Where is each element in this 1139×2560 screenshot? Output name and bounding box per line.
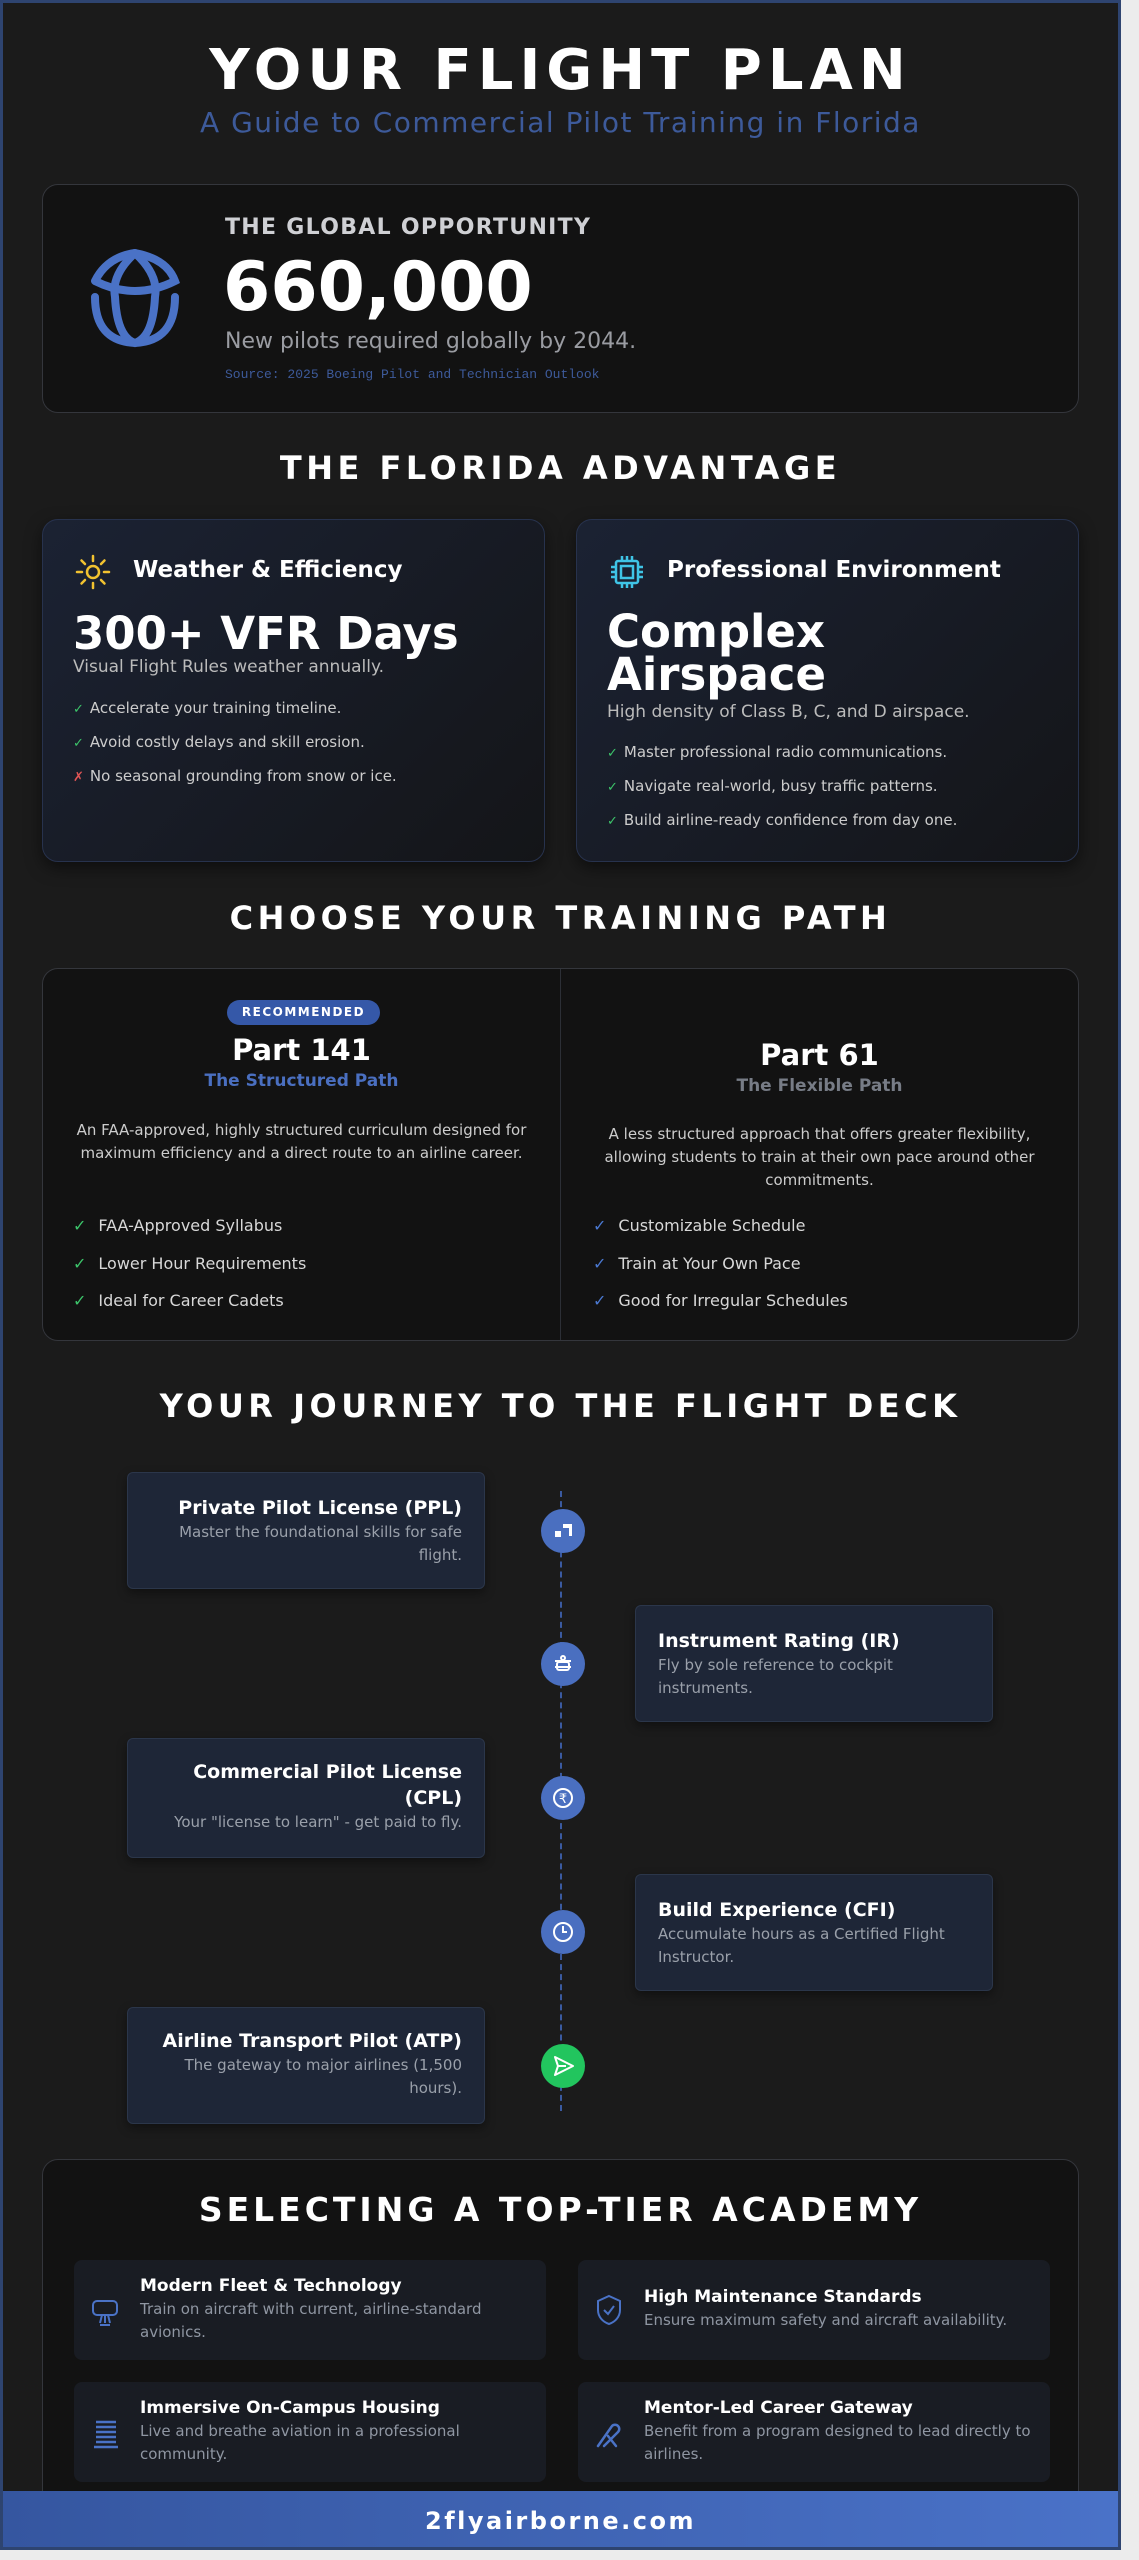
timeline: [127, 1472, 993, 2125]
part 141 column: An FAA-approved, highly structured curriculum designed for maximum efficiency and a direct route to an airline career.: [77, 1121, 526, 1162]
step: PPL: Private Pilot License (PPL): [178, 1497, 462, 1519]
icon: cpl: [541, 1776, 585, 1820]
step: CPL: Commercial Pilot License (CPL): [193, 1761, 462, 1809]
icon: globe: [91, 249, 180, 348]
heading: Weather & Efficiency: [133, 557, 403, 583]
heading: SELECTING A TOP-TIER ACADEMY: [199, 2190, 922, 2229]
checklist: ✓ Lower Hour Requirements: [73, 1254, 306, 1272]
stat: Airspace: [607, 648, 826, 701]
checklist: ✓ Customizable Schedule: [593, 1216, 805, 1235]
tile: maintenance: High Maintenance Standards: [644, 2287, 922, 2307]
stat: [607, 605, 826, 701]
bullets: [73, 699, 397, 785]
tile: maintenance: Ensure maximum safety and aircraft availability.: [644, 2311, 1007, 2329]
label: THE GLOBAL OPPORTUNITY: [225, 215, 591, 240]
badge: [227, 1000, 380, 1025]
bullets: ✗ No seasonal grounding from snow or ice.: [73, 767, 397, 785]
bullets: ✓ Accelerate your training timeline.: [73, 699, 341, 717]
step: CFI: Accumulate hours as a Certified Flight Instructor.: [658, 1925, 945, 1966]
checklist: [593, 1216, 848, 1310]
panel: training paths: [42, 968, 1079, 1341]
step: PPL: [127, 1472, 485, 1589]
part 61 column: A less structured approach that offers greater flexibility, allowing students to train at their own pace around other commitments.: [604, 1125, 1035, 1189]
subtitle: A Guide to Commercial Pilot Training in Florida: [200, 106, 921, 139]
step: ATP: Airline Transport Pilot (ATP): [163, 2030, 462, 2052]
title: YOUR FLIGHT PLAN: [209, 38, 912, 103]
stat: Complex: [607, 605, 825, 658]
step: CPL: Your "license to learn" - get paid to fly.: [174, 1813, 462, 1831]
bullets: ✓ Avoid costly delays and skill erosion.: [73, 733, 365, 751]
heading: training path: CHOOSE YOUR TRAINING PATH: [230, 899, 891, 937]
panel: weather: [42, 519, 545, 862]
part 61 column: Part 61: [760, 1038, 879, 1072]
step: PPL: Master the foundational skills for safe flight.: [179, 1523, 462, 1564]
checklist: ✓ Good for Irregular Schedules: [593, 1291, 848, 1310]
icon: chip: [611, 556, 643, 588]
step: CPL: [127, 1738, 485, 1858]
panel: weather: Visual Flight Rules weather annually.: [73, 657, 384, 677]
heading: florida advantage: THE FLORIDA ADVANTAGE: [280, 449, 841, 487]
description: New pilots required globally by 2044.: [225, 329, 636, 354]
panel: professional environment: [576, 519, 1079, 862]
icon: sun: [76, 554, 110, 590]
icon: cpl: ₹: [559, 1792, 567, 1807]
checklist: ✓ Train at Your Own Pace: [593, 1254, 801, 1272]
tile: housing: Immersive On-Campus Housing: [140, 2398, 440, 2418]
tile: fleet: Train on aircraft with current, airline-standard avionics.: [140, 2300, 481, 2341]
step: ATP: [127, 2007, 485, 2124]
part 61 column: The Flexible Path: [736, 1076, 903, 1096]
bullets: [607, 743, 957, 829]
icon: send: [541, 2044, 585, 2088]
tile: career: [578, 2382, 1050, 2482]
step: CFI: [635, 1874, 993, 1991]
bullets: ✓ Master professional radio communications.: [607, 743, 947, 761]
footer: [3, 2491, 1118, 2551]
tile: housing: [74, 2382, 546, 2482]
tile: housing: Live and breathe aviation in a professional community.: [140, 2422, 460, 2463]
part 141 column: The Structured Path: [204, 1071, 398, 1091]
step: IR: [635, 1605, 993, 1722]
bullets: ✓ Build airline-ready confidence from day one.: [607, 811, 957, 829]
checklist: [73, 1216, 306, 1310]
tile: career: Benefit from a program designed to lead directly to airlines.: [644, 2422, 1031, 2463]
footer: 2flyairborne.com: [425, 2507, 696, 2535]
icon: clock: [541, 1910, 585, 1954]
part 61 column: [593, 1038, 1035, 1310]
panel: global opportunity: [42, 184, 1079, 413]
panel: academy: [42, 2159, 1079, 2560]
heading: Professional Environment: [667, 557, 1001, 583]
source: Source: 2025 Boeing Pilot and Technician Outlook: [225, 367, 599, 382]
step: CFI: Build Experience (CFI): [658, 1899, 895, 1921]
bullets: ✓ Navigate real-world, busy traffic patterns.: [607, 777, 938, 795]
tile: maintenance: [578, 2260, 1050, 2360]
part 141 column: Part 141: [232, 1033, 371, 1067]
stat: 300+ VFR Days: [73, 607, 459, 660]
heading: journey: YOUR JOURNEY TO THE FLIGHT DECK: [160, 1387, 961, 1425]
big number: 660,000: [223, 248, 533, 327]
badge: RECOMMENDED: [242, 1005, 365, 1019]
step: ATP: The gateway to major airlines (1,500 hours).: [185, 2056, 462, 2097]
checklist: ✓ Ideal for Career Cadets: [73, 1291, 284, 1310]
panel: professional environment: High density of Class B, C, and D airspace.: [607, 702, 970, 722]
tile: career: Mentor-Led Career Gateway: [644, 2398, 913, 2418]
tile: fleet: [74, 2260, 546, 2360]
step: IR: Instrument Rating (IR): [658, 1630, 900, 1652]
icon: ppl: [541, 1509, 585, 1553]
step: IR: Fly by sole reference to cockpit instruments.: [658, 1656, 893, 1697]
tile: fleet: Modern Fleet & Technology: [140, 2276, 402, 2296]
icon: ir: [541, 1642, 585, 1686]
part 141 column: [73, 1000, 526, 1310]
checklist: ✓ FAA-Approved Syllabus: [73, 1216, 282, 1235]
